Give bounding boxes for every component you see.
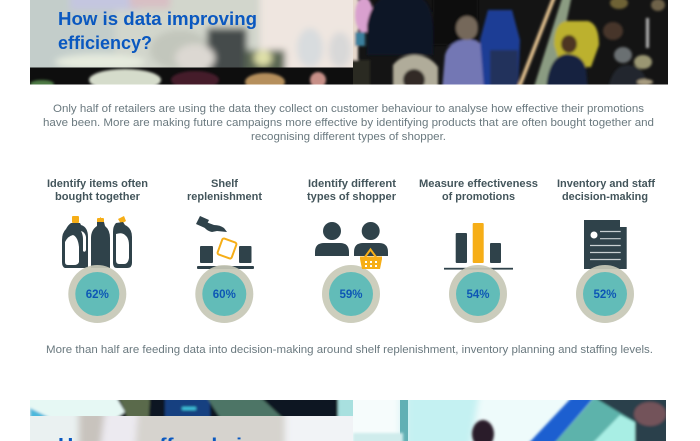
column heading: types of shopper xyxy=(307,191,397,203)
heading: how is data improving efficiency xyxy=(58,9,257,53)
icon: hand placing product on shelf xyxy=(196,216,254,269)
stat circle: 52% xyxy=(576,265,634,323)
icon: document xyxy=(584,220,627,269)
stat circle: 60%: 60% xyxy=(213,289,236,301)
intro paragraph: have been. More are making future campaigns more effective by identifying products that are often bought together and xyxy=(43,117,654,129)
heading: how is data improving efficiency: How is data improving xyxy=(58,9,257,29)
column heading: Shelf xyxy=(211,178,238,190)
stat circle: 62% xyxy=(68,265,126,323)
column: identify different types of shopper xyxy=(307,178,397,323)
stat circle: 62%: 62% xyxy=(86,289,109,301)
column heading xyxy=(47,178,148,203)
column heading: Inventory and staff xyxy=(557,178,655,190)
column: measure effectiveness of promotions xyxy=(419,178,538,323)
stat circle: 59%: 59% xyxy=(339,289,363,301)
stat circle: 59% xyxy=(322,265,380,323)
stat circle: 60% xyxy=(195,265,253,323)
icon: three bottles xyxy=(62,216,132,268)
column heading xyxy=(419,178,538,203)
column heading: of promotions xyxy=(442,191,515,203)
intro paragraph: recognising different types of shopper. xyxy=(251,131,446,143)
column: inventory and staff decision-making xyxy=(557,178,655,323)
stat circle: 54% xyxy=(449,265,507,323)
column heading: replenishment xyxy=(187,191,262,203)
icon: bar chart xyxy=(444,223,513,270)
column heading xyxy=(307,178,397,203)
heading: how is data improving efficiency: efficiency? xyxy=(58,33,152,53)
column heading: bought together xyxy=(55,191,141,203)
column heading: Measure effectiveness xyxy=(419,178,538,190)
column heading: decision-making xyxy=(562,191,648,203)
intro paragraph xyxy=(43,103,654,143)
column heading xyxy=(557,178,655,203)
summary sentence: More than half are feeding data into decision-making around shelf replenishment, inventory planning and staffing levels. xyxy=(46,344,653,356)
hero photo: shopping crowd xyxy=(30,0,668,84)
column heading: Identify different xyxy=(308,178,396,190)
second section photo: shopper in a mall xyxy=(30,400,666,441)
column heading: Identify items often xyxy=(47,178,148,190)
icon: two shoppers with basket xyxy=(315,222,388,269)
intro paragraph: Only half of retailers are using the data they collect on customer behaviour to analyse how effective their promotions xyxy=(53,103,645,115)
column: identify items often bought together xyxy=(47,178,148,323)
column: shelf replenishment xyxy=(187,178,262,323)
stat circle: 52%: 52% xyxy=(593,289,617,301)
column heading xyxy=(187,178,262,203)
stat circle: 54%: 54% xyxy=(466,289,490,301)
